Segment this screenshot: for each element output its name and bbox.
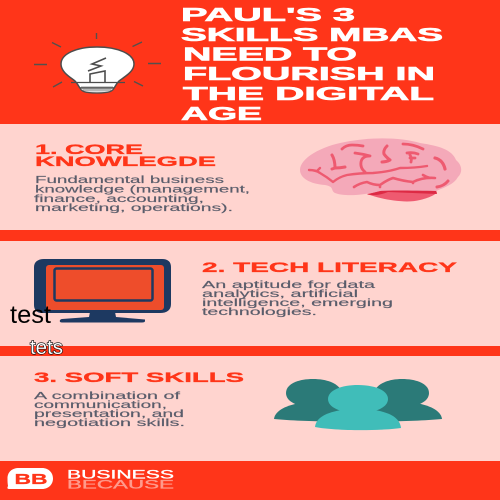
- header panel background: [0, 0, 500, 124]
- logo wordmark: BECAUSE: [67, 480, 175, 492]
- text block: soft skills: negotiation skills.: [34, 417, 185, 429]
- icon: light bulb: [34, 33, 161, 93]
- title: AGE: [181, 104, 262, 124]
- title: FLOURISH IN: [183, 64, 435, 84]
- heading: core knowledge: [35, 141, 216, 169]
- panel background: core knowledge: [0, 124, 500, 230]
- text block: tech literacy: technologies.: [202, 306, 317, 318]
- text block: tech literacy: An aptitude for data: [202, 279, 375, 291]
- panel background: tech literacy: [0, 241, 500, 346]
- heading: tech literacy: 2. TECH LITERACY: [202, 259, 458, 275]
- text block: core knowledge: [34, 174, 250, 214]
- annotation: tets: tets: [30, 337, 63, 359]
- text block: core knowledge: knowledge (management,: [35, 184, 250, 196]
- logo wordmark: BUSINESS: [67, 470, 175, 482]
- heading: core knowledge: 1. CORE: [35, 141, 143, 157]
- text block: soft skills: communication,: [34, 399, 167, 411]
- logo wordmark: [67, 470, 175, 492]
- red band one: [0, 230, 500, 241]
- logo: BB speech bubble: [7, 468, 53, 489]
- text block: tech literacy: [202, 279, 393, 318]
- annotation: test: test: [10, 301, 51, 329]
- text block: soft skills: A combination of: [34, 390, 180, 402]
- title: [181, 5, 443, 124]
- text block: core knowledge: marketing, operations).: [35, 202, 233, 214]
- red band two: [0, 346, 500, 356]
- logo: BB speech bubble: BB: [14, 471, 48, 488]
- title: PAUL'S 3: [181, 5, 355, 25]
- icon: group of people: [274, 379, 442, 430]
- text block: soft skills: presentation, and: [34, 408, 184, 420]
- text block: core knowledge: finance, accounting,: [34, 193, 204, 205]
- panel background: soft skills: [0, 356, 500, 461]
- icon: computer monitor: [34, 259, 171, 322]
- title: NEED TO: [183, 44, 357, 64]
- heading: soft skills: 3. SOFT SKILLS: [34, 369, 244, 385]
- title: THE DIGITAL: [183, 84, 434, 104]
- text block: soft skills: [34, 390, 185, 429]
- text block: tech literacy: analytics, artificial: [202, 288, 358, 300]
- text block: core knowledge: Fundamental business: [35, 174, 224, 186]
- text block: tech literacy: intelligence, emerging: [202, 297, 393, 309]
- icon: brain: [300, 138, 461, 201]
- footer background: [0, 461, 500, 500]
- title: SKILLS MBAS: [181, 25, 443, 45]
- heading: core knowledge: KNOWLEGDE: [35, 153, 216, 169]
